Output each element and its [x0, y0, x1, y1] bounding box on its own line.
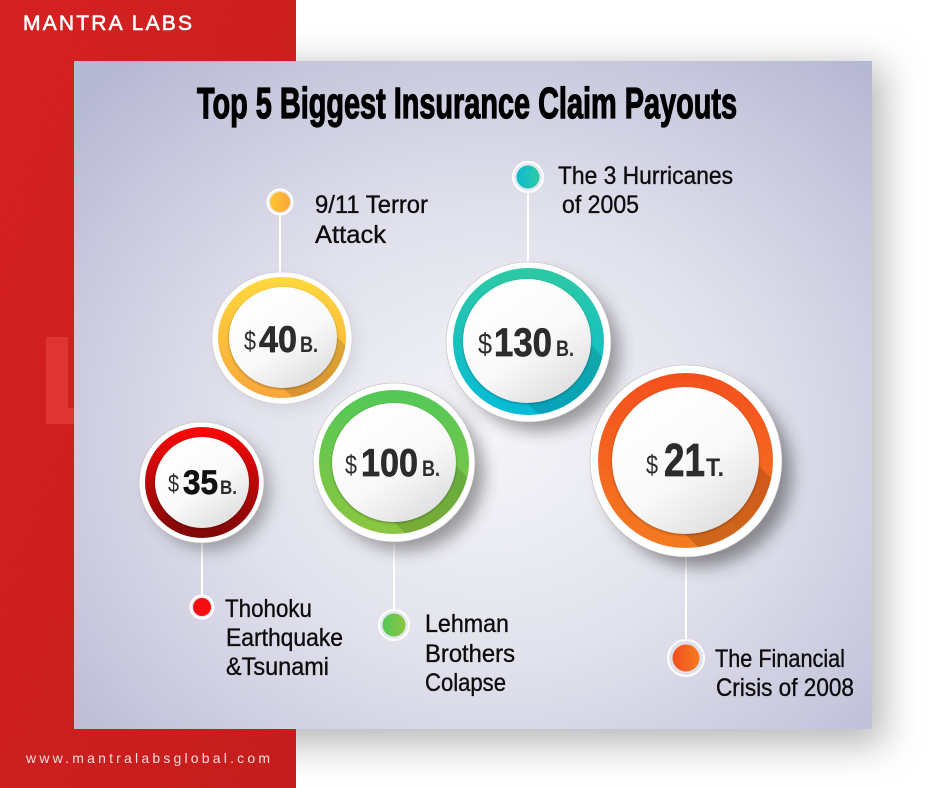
icon: red marker dot — [190, 596, 214, 618]
item: 9/11 Terror Attack — [212, 190, 428, 428]
red paper texture — [0, 0, 296, 788]
badge: $21T — [590, 364, 802, 577]
badge: $35B — [139, 422, 270, 550]
icon: orange marker dot — [668, 640, 704, 676]
item: Thohoku Earthquake and Tsunami — [139, 422, 343, 681]
connector line — [393, 541, 395, 611]
icon: green marker dot — [379, 610, 409, 640]
connector line — [201, 542, 203, 596]
icon: teal marker dot — [513, 162, 543, 192]
badge: $100B: 100 — [361, 442, 418, 485]
item: The Financial Crisis of 2008 — [590, 365, 854, 702]
label: Brothers — [425, 640, 515, 668]
label — [558, 162, 733, 219]
label: Attack — [315, 221, 386, 249]
badge: $35B: B. — [220, 478, 237, 499]
soft shadow around the main panel — [250, 66, 884, 745]
badge: $130B: $ — [478, 328, 492, 361]
badge: $40B — [212, 272, 358, 410]
label: 9/11 Terror — [315, 191, 428, 219]
badge: $40B: $ — [244, 326, 256, 356]
connector line — [685, 556, 687, 641]
connector line — [527, 191, 529, 263]
badge: $130B: B. — [556, 336, 574, 361]
panel: main infographic background — [74, 61, 872, 729]
brand logo text: MANTRA LABS — [23, 12, 192, 35]
badge: $100B: $ — [345, 450, 357, 480]
label — [225, 595, 343, 681]
badge: $21T: $ — [646, 450, 658, 480]
label — [425, 610, 515, 697]
badge: $21T: 21 — [664, 434, 705, 486]
badge: $35B: $ — [168, 470, 179, 498]
label: &Tsunami — [226, 653, 329, 681]
item: The 3 Hurricanes of 2005 — [446, 162, 733, 453]
connector line — [279, 214, 281, 273]
badge: $40B: B. — [300, 332, 318, 357]
label — [315, 191, 428, 249]
item: Lehman Brothers Colapse — [313, 383, 515, 697]
badge: $130B — [446, 262, 630, 440]
badge: $35B: 35 — [183, 464, 218, 502]
badge: $100B: B. — [422, 456, 440, 481]
badge: $130B: 130 — [494, 321, 552, 365]
label: of 2005 — [562, 191, 639, 219]
label: Thohoku — [225, 595, 312, 623]
label: Earthquake — [226, 624, 343, 652]
badge: $21T: T. — [706, 454, 724, 482]
label: The 3 Hurricanes — [558, 162, 733, 190]
website url: www.mantralabsglobal.com — [25, 750, 270, 766]
label — [715, 645, 854, 702]
badge: $40B: 40 — [259, 319, 297, 360]
panel: red brand background — [0, 0, 296, 788]
label: Colapse — [425, 669, 506, 697]
icon: yellow marker dot — [268, 190, 292, 214]
badge: $100B — [312, 382, 494, 560]
label: Lehman — [425, 610, 509, 638]
accent: light red L shape — [46, 337, 74, 424]
label: The Financial — [715, 645, 845, 673]
label: Crisis of 2008 — [716, 674, 854, 702]
